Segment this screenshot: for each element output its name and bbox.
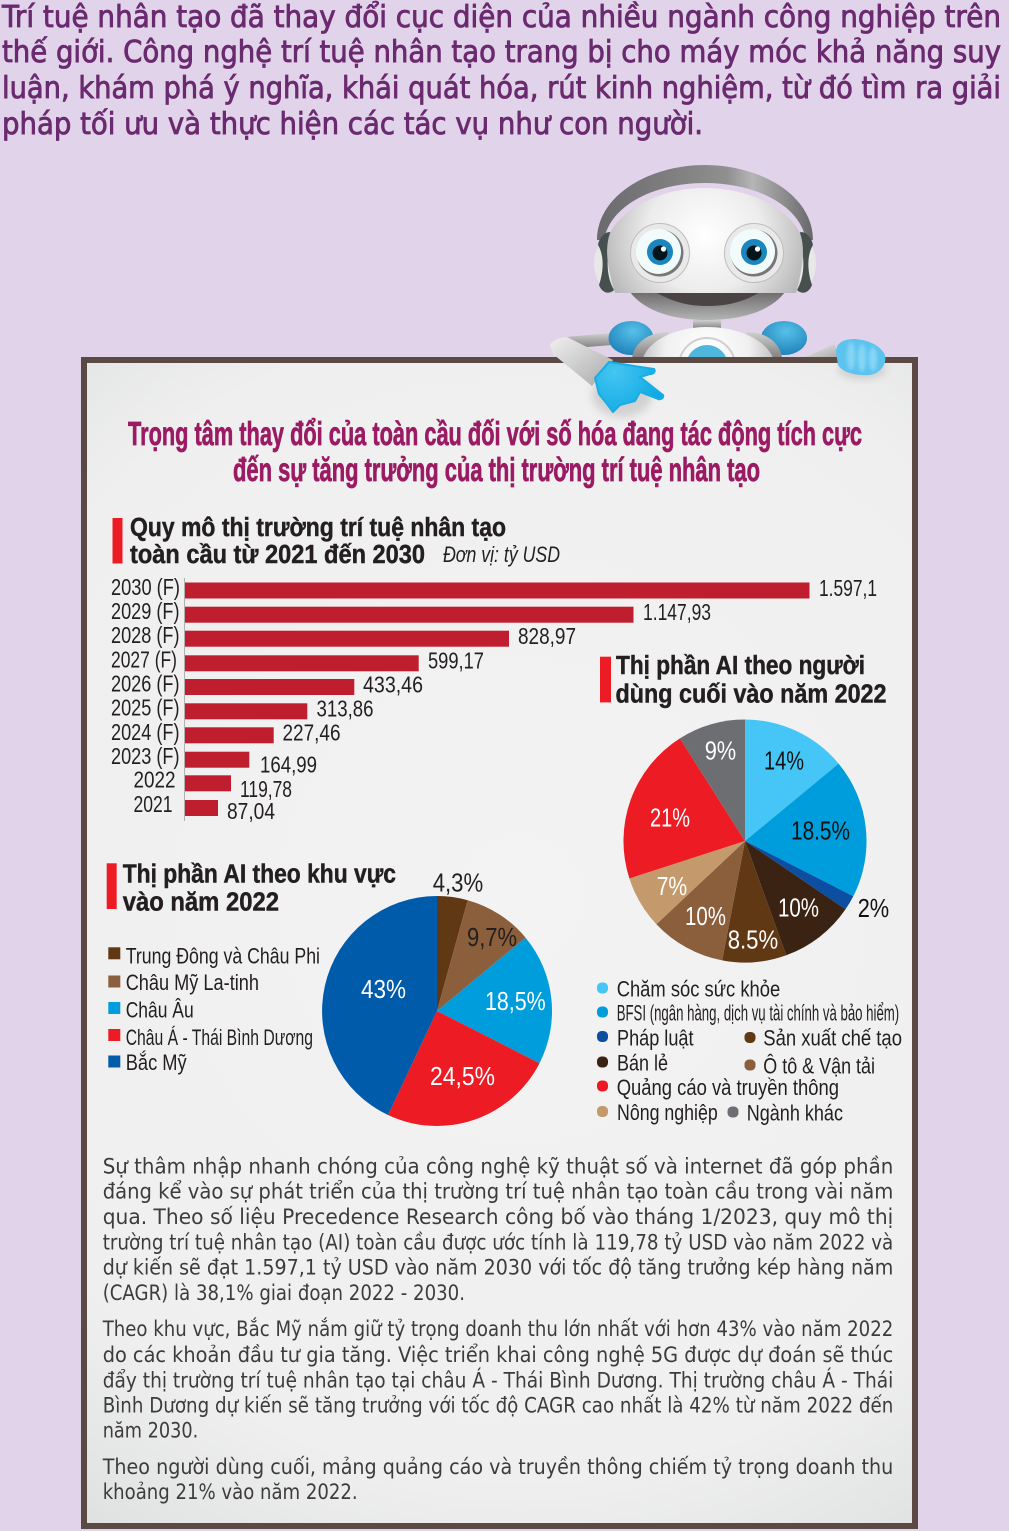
text block: paragraph 1: dự kiến sẽ đạt 1.597,1 tỷ USD vào năm 2030 với tốc độ tăng trưởng kép hàng năm bbox=[103, 1255, 893, 1279]
bar chart: market size by year bbox=[111, 574, 877, 824]
text block: paragraph 2: năm 2030. bbox=[103, 1418, 198, 1442]
pie chart: share by end user: 14% bbox=[764, 745, 804, 775]
bar chart: market size by year: 1.147,93 bbox=[643, 599, 711, 625]
bar chart: market size by year: 164,99 bbox=[260, 752, 317, 778]
intro text bbox=[1, 0, 1001, 142]
pie chart: share by region: 4,3% bbox=[433, 868, 483, 898]
pie chart: share by region bbox=[322, 868, 552, 1126]
pie chart: share by region: 43% bbox=[361, 974, 406, 1004]
text block: paragraph 2: do các khoản đầu tư gia tăng. Việc triển khai công nghệ 5G được dự đoán sẽ thúc bbox=[103, 1343, 893, 1367]
bar chart: market size by year: 87,04 bbox=[227, 798, 275, 824]
legend: share by end user: Pháp luật bbox=[617, 1026, 694, 1051]
bar chart: market size by year: 2025 (F) bbox=[111, 695, 180, 721]
heading: share by end user: dùng cuối vào năm 2022 bbox=[616, 681, 886, 709]
legend: share by end user: Ngành khác bbox=[747, 1101, 843, 1126]
pie chart: share by end user: 2% bbox=[858, 893, 889, 923]
heading: market size bbox=[112, 514, 560, 569]
legend: share by region bbox=[108, 943, 320, 1075]
text block: paragraph 1: trường trí tuệ nhân tạo (AI) toàn cầu được ước tính là 119,78 tỷ USD vào năm 2022 và bbox=[103, 1230, 893, 1254]
heading: share by end user: Thị phần AI theo người bbox=[616, 652, 865, 680]
pie chart: share by region: 18,5% bbox=[485, 986, 546, 1016]
heading: share by end user bbox=[600, 652, 886, 709]
pie chart: share by region: 24,5% bbox=[430, 1061, 495, 1091]
text block: paragraph 3 bbox=[102, 1455, 893, 1504]
text block: paragraph 3: Theo người dùng cuối, mảng quảng cáo và truyền thông chiếm tỷ trọng doanh thu bbox=[102, 1455, 893, 1479]
bar chart: market size by year: 313,86 bbox=[316, 696, 374, 722]
bar chart: market size by year: 2021 bbox=[134, 791, 172, 817]
bar chart: market size by year: 2029 (F) bbox=[111, 598, 180, 624]
bar chart: market size by year: 2028 (F) bbox=[111, 622, 180, 648]
bar chart: market size by year: 599,17 bbox=[428, 648, 484, 674]
bar chart: market size by year: 2026 (F) bbox=[111, 671, 180, 697]
title bbox=[128, 415, 862, 488]
pie chart: share by end user: 9% bbox=[705, 735, 736, 765]
legend: share by end user: Bán lẻ bbox=[617, 1051, 668, 1076]
legend: share by end user bbox=[597, 977, 902, 1126]
text block: paragraph 1: qua. Theo số liệu Precedence Research công bố vào tháng 1/2023, quy mô thị bbox=[103, 1205, 893, 1229]
pie chart: share by end user bbox=[623, 720, 889, 963]
heading: share by region bbox=[107, 860, 396, 917]
legend: share by end user: Ô tô & Vận tải bbox=[763, 1053, 875, 1078]
pie chart: share by end user: 18.5% bbox=[791, 815, 850, 845]
pie chart: share by end user: 10% bbox=[778, 893, 819, 923]
legend: share by end user: Sản xuất chế tạo bbox=[763, 1026, 902, 1051]
pie chart: share by end user: 10% bbox=[685, 901, 726, 931]
legend: share by region: Trung Đông và Châu Phi bbox=[126, 943, 320, 968]
pie chart: share by end user: 21% bbox=[650, 803, 690, 833]
panel: main card bbox=[84, 360, 915, 1526]
bar chart: market size by year: 433,46 bbox=[363, 672, 423, 698]
bar chart: market size by year: 2024 (F) bbox=[111, 719, 180, 745]
legend: share by end user: Chăm sóc sức khỏe bbox=[617, 977, 780, 1002]
pie chart: share by end user: 7% bbox=[657, 871, 687, 901]
text block: paragraph 2: Theo khu vực, Bắc Mỹ nắm giữ tỷ trọng doanh thu lớn nhất với hơn 43% vào năm 2022 bbox=[102, 1317, 893, 1341]
text block: paragraph 2: Bình Dương dự kiến sẽ tăng trưởng với tốc độ CAGR cao nhất là 42% từ năm 2022 đến bbox=[103, 1393, 893, 1417]
text block: paragraph 2 bbox=[102, 1317, 893, 1442]
bar chart: market size by year: 227,46 bbox=[282, 720, 340, 746]
bar chart: market size by year: 2027 (F) bbox=[111, 647, 177, 673]
heading: share by region: vào năm 2022 bbox=[123, 889, 279, 917]
bar chart: market size by year: 2022 bbox=[134, 767, 176, 793]
heading: share by region: Thị phần AI theo khu vực bbox=[123, 860, 396, 888]
pie chart: share by region: 9,7% bbox=[467, 922, 517, 952]
heading: market size: toàn cầu từ 2021 đến 2030 bbox=[130, 541, 425, 569]
heading: market size: Đơn vị: tỷ USD bbox=[443, 542, 560, 567]
text block: paragraph 2: đẩy thị trường trí tuệ nhân tạo tại châu Á - Thái Bình Dương. Thị trường châu Á - Thái bbox=[103, 1367, 893, 1392]
text block: paragraph 1: Sự thâm nhập nhanh chóng của công nghệ kỹ thuật số và internet đã góp phần bbox=[103, 1154, 893, 1178]
legend: share by end user: Nông nghiệp bbox=[617, 1100, 718, 1125]
text block: paragraph 3: khoảng 21% vào năm 2022. bbox=[103, 1480, 358, 1504]
text block: paragraph 1 bbox=[103, 1154, 893, 1305]
bar chart: market size by year: 119,78 bbox=[240, 776, 292, 802]
icon: robot arms and hands over the panel bbox=[550, 337, 886, 417]
legend: share by region: Châu Mỹ La-tinh bbox=[126, 970, 259, 995]
legend: share by region: Châu Á - Thái Bình Dương bbox=[126, 1025, 313, 1050]
icon: robot body behind the panel bbox=[566, 165, 837, 357]
bar chart: market size by year: 2030 (F) bbox=[111, 574, 180, 600]
legend: share by end user: Quảng cáo và truyền thông bbox=[617, 1075, 839, 1100]
intro text: pháp tối ưu và thực hiện các tác vụ như con người. bbox=[2, 107, 703, 142]
text block: paragraph 1: đáng kể vào sự phát triển của thị trường trí tuệ nhân tạo toàn cầu trong vài năm bbox=[103, 1179, 893, 1203]
heading: market size: Quy mô thị trường trí tuệ nhân tạo bbox=[130, 514, 506, 542]
title: đến sự tăng trưởng của thị trường trí tuệ nhân tạo bbox=[233, 451, 760, 488]
bar chart: market size by year: 2023 (F) bbox=[111, 743, 180, 769]
pie chart: share by end user: 8.5% bbox=[728, 924, 778, 954]
text block: paragraph 1: (CAGR) là 38,1% giai đoạn 2022 - 2030. bbox=[103, 1281, 465, 1305]
bar chart: market size by year: 1.597,1 bbox=[819, 575, 877, 601]
bar chart: market size by year: 828,97 bbox=[518, 623, 576, 649]
legend: share by region: Châu Âu bbox=[126, 998, 194, 1023]
legend: share by region: Bắc Mỹ bbox=[126, 1050, 187, 1075]
